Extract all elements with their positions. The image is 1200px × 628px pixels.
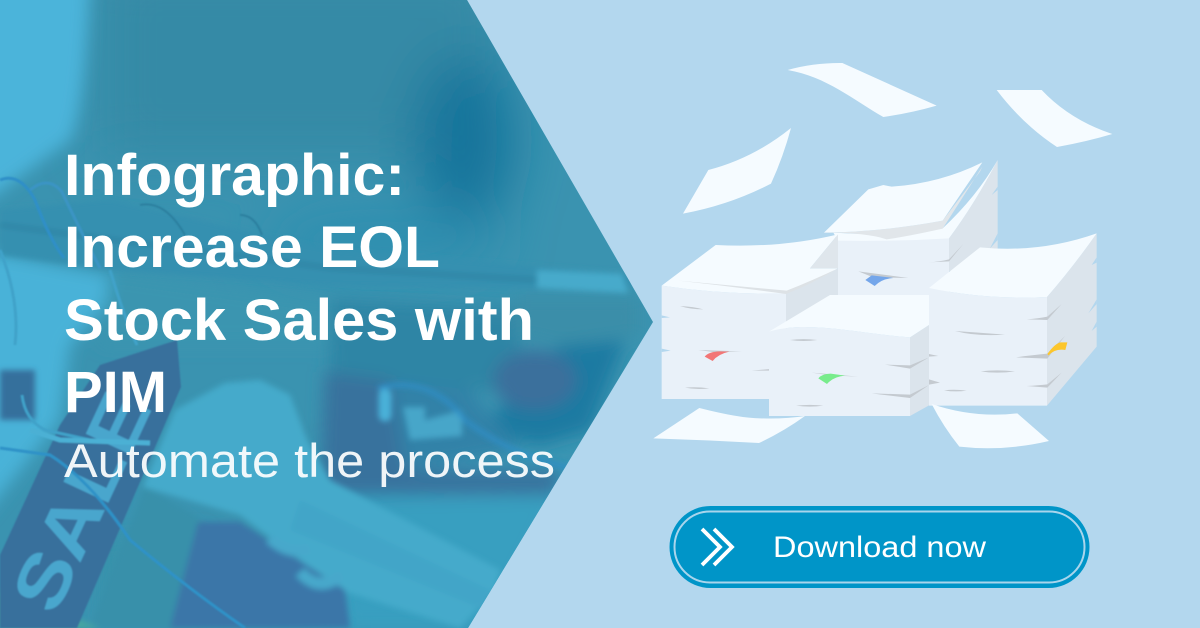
title: Increase EOL <box>64 215 440 280</box>
blue tab <box>865 275 893 286</box>
sale tag <box>0 340 181 628</box>
download button <box>670 506 1090 588</box>
yellow tab <box>1047 342 1067 355</box>
red tab <box>705 351 729 361</box>
flying sheet bottom left <box>653 408 805 443</box>
chevron photo panel <box>0 0 660 628</box>
paper stack centre <box>769 295 929 416</box>
flying sheet left <box>683 128 791 214</box>
flying sheet top centre <box>788 63 937 117</box>
button label: Download now <box>773 531 986 564</box>
chevron photo panel: SALE <box>0 381 167 624</box>
paper stack back <box>824 160 998 300</box>
title: PIM <box>64 360 167 425</box>
icon: double chevron <box>702 529 732 565</box>
title <box>64 143 534 425</box>
flying sheet top right <box>997 90 1112 147</box>
title: Infographic: <box>64 143 405 208</box>
title: Stock Sales with <box>64 288 534 353</box>
paper stack left <box>662 234 838 399</box>
subtitle: Automate the process <box>64 434 555 487</box>
flying sheet bottom right <box>932 404 1049 448</box>
green tab <box>818 374 845 384</box>
paper stack right <box>929 233 1097 406</box>
paper illustration <box>653 63 1112 448</box>
